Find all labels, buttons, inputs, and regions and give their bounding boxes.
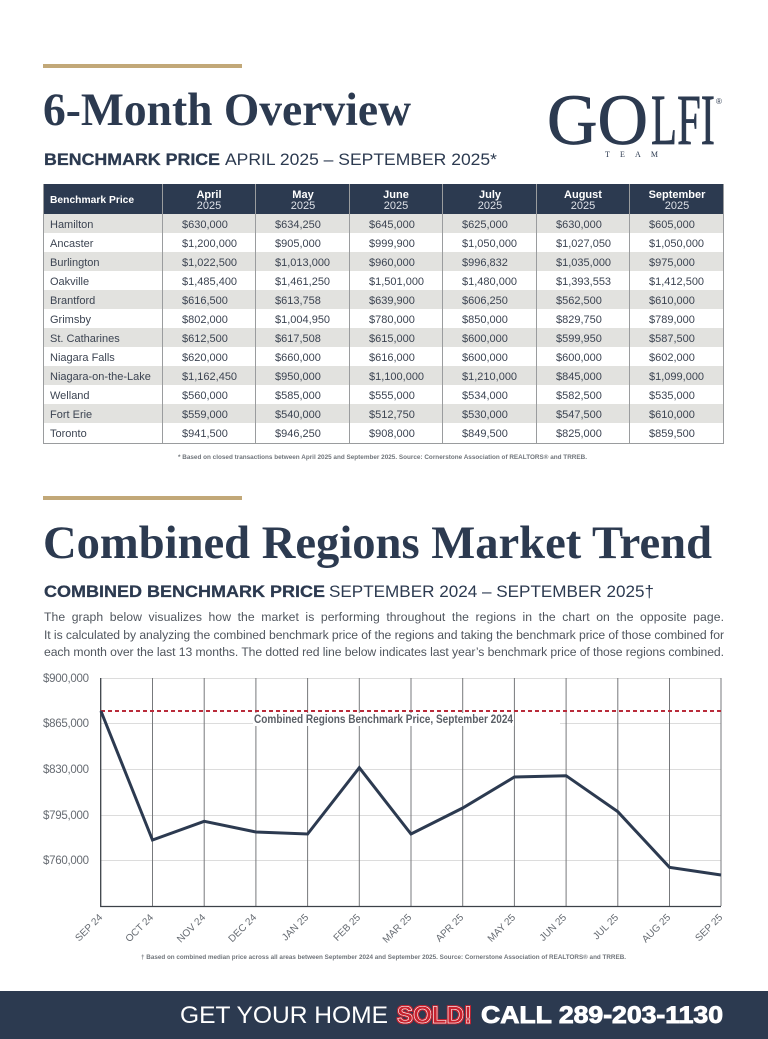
row: Hamilton: $634,250 — [275, 219, 321, 231]
row: Ancaster: Ancaster — [50, 238, 94, 250]
table header: May — [292, 189, 315, 201]
row: Ancaster: $1,050,000 — [462, 238, 517, 250]
table header: 2025 — [291, 200, 315, 212]
y-axis labels — [43, 673, 89, 867]
x-axis labels: SEP 24 — [73, 912, 105, 944]
row: Welland: $585,000 — [275, 390, 321, 402]
table header: June — [383, 189, 409, 201]
row: Fort Erie: $530,000 — [462, 409, 508, 421]
row: Ancaster — [50, 238, 704, 250]
row: Welland — [50, 390, 695, 402]
x-axis labels: AUG 25 — [640, 912, 673, 945]
row: Grimsby: $789,000 — [649, 314, 695, 326]
row: Burlington — [50, 257, 695, 269]
y-axis labels: $795,000 — [43, 810, 89, 822]
x-axis labels: JAN 25 — [280, 912, 311, 943]
row: Grimsby: $780,000 — [369, 314, 415, 326]
row: Hamilton — [50, 219, 695, 231]
row: Burlington: Burlington — [50, 257, 100, 269]
footer banner — [0, 991, 768, 1039]
line chart: combined benchmark price — [43, 673, 725, 946]
row: Grimsby — [50, 314, 695, 326]
row: Welland: $560,000 — [182, 390, 228, 402]
row: Hamilton: Hamilton — [50, 219, 93, 231]
reference line label: Combined Regions Benchmark Price, September 2024 — [254, 714, 514, 726]
subtitle: benchmark price: APRIL 2025 – SEPTEMBER 2025* — [225, 150, 497, 169]
row: Oakville: Oakville — [50, 276, 89, 288]
row: Grimsby: Grimsby — [50, 314, 91, 326]
logo: Golfi Team: GO — [547, 80, 648, 160]
row: Oakville: $1,501,000 — [369, 276, 424, 288]
table footnote: * Based on closed transactions between April 2025 and September 2025. Source: Cornerstone Association of REALTORS® and TRREB. — [178, 454, 587, 461]
row: Brantford — [50, 295, 695, 307]
table header: 2025 — [665, 200, 689, 212]
row: Oakville: $1,412,500 — [649, 276, 704, 288]
row: Burlington: $960,000 — [369, 257, 415, 269]
logo: Golfi Team — [547, 80, 722, 160]
row: Niagara Falls: $600,000 — [556, 352, 602, 364]
row: Oakville: $1,393,553 — [556, 276, 611, 288]
x-axis labels: JUL 25 — [591, 912, 621, 942]
table header: 2025 — [197, 200, 221, 212]
call to action text: GET YOUR HOME — [180, 1002, 388, 1029]
row: Toronto: $946,250 — [275, 428, 321, 440]
table header — [43, 184, 724, 214]
description text: It is calculated by analyzing the combined benchmark price of the regions and taking the benchmark price of those combined for — [44, 628, 724, 642]
row: Ancaster: $1,200,000 — [182, 238, 237, 250]
y-axis labels: $830,000 — [43, 764, 89, 776]
subtitle: combined benchmark price — [44, 582, 654, 601]
row: Fort Erie — [50, 409, 695, 421]
row: Niagara Falls: $602,000 — [649, 352, 695, 364]
table header: August — [564, 189, 602, 201]
row: Ancaster: $1,050,000 — [649, 238, 704, 250]
row: Toronto: $941,500 — [182, 428, 228, 440]
row: Niagara-on-the-Lake: Niagara-on-the-Lake — [50, 371, 151, 383]
row: St. Catharines: $617,508 — [275, 333, 321, 345]
row: Welland: $534,000 — [462, 390, 508, 402]
row: Brantford: $639,900 — [369, 295, 415, 307]
row: Fort Erie: $540,000 — [275, 409, 321, 421]
row: Toronto: $849,500 — [462, 428, 508, 440]
call to action text: CALL 289-203-1130 — [481, 1002, 723, 1029]
y-axis labels: $900,000 — [43, 673, 89, 685]
chart footnote: † Based on combined median price across all areas between September 2024 and September 2025. Source: Cornerstone Association of REALTORS® and TRREB. — [141, 954, 626, 961]
call to action text: SOLD! — [397, 1002, 472, 1029]
row: Hamilton: $630,000 — [556, 219, 602, 231]
x-axis labels: SEP 25 — [693, 912, 725, 944]
row: Niagara-on-the-Lake: $1,210,000 — [462, 371, 517, 383]
row: Ancaster: $999,900 — [369, 238, 415, 250]
x-axis labels: FEB 25 — [332, 912, 363, 944]
accent rule: overview — [43, 64, 242, 68]
row: Brantford: $613,758 — [275, 295, 321, 307]
accent rule: trend — [43, 496, 242, 500]
row: Niagara Falls: $616,000 — [369, 352, 415, 364]
table header: 2025 — [571, 200, 595, 212]
row: Niagara-on-the-Lake: $1,162,450 — [182, 371, 237, 383]
logo: Golfi Team: LFI — [651, 80, 715, 160]
row: St. Catharines: $600,000 — [462, 333, 508, 345]
x-axis labels: MAY 25 — [486, 912, 518, 945]
row: Ancaster: $1,027,050 — [556, 238, 611, 250]
row: Niagara Falls: $620,000 — [182, 352, 228, 364]
row: Niagara Falls: $600,000 — [462, 352, 508, 364]
description text — [44, 610, 724, 659]
row: St. Catharines — [50, 333, 695, 345]
x-axis labels: NOV 24 — [175, 912, 208, 945]
row: Oakville: $1,480,000 — [462, 276, 517, 288]
row: Hamilton: $630,000 — [182, 219, 228, 231]
table: benchmark prices — [43, 184, 724, 444]
row: Burlington: $1,035,000 — [556, 257, 611, 269]
row: Toronto — [50, 428, 695, 440]
row: Hamilton: $605,000 — [649, 219, 695, 231]
row: Niagara-on-the-Lake: $1,099,000 — [649, 371, 704, 383]
row: Niagara-on-the-Lake: $1,100,000 — [369, 371, 424, 383]
row: St. Catharines: $615,000 — [369, 333, 415, 345]
row: Welland: $555,000 — [369, 390, 415, 402]
description text: each month over the last 13 months. The dotted red line below indicates last year’s benchmark price of those regions combined. — [44, 645, 724, 659]
subtitle: benchmark price: BENCHMARK PRICE — [44, 150, 220, 169]
row: Welland: $535,000 — [649, 390, 695, 402]
x-axis labels: MAR 25 — [381, 912, 414, 946]
row: Niagara Falls — [50, 352, 695, 364]
row: St. Catharines: $587,500 — [649, 333, 695, 345]
row: Oakville: $1,485,400 — [182, 276, 237, 288]
call to action text — [180, 1002, 723, 1029]
row: Niagara-on-the-Lake — [50, 371, 704, 383]
title: Combined Regions Market Trend: Combined Regions Market Trend — [43, 517, 712, 569]
table header: April — [196, 189, 222, 201]
x-axis labels: JUN 25 — [538, 912, 569, 944]
row: Brantford: $606,250 — [462, 295, 508, 307]
row: Grimsby: $802,000 — [182, 314, 228, 326]
subtitle: combined benchmark price: SEPTEMBER 2024 – SEPTEMBER 2025† — [329, 582, 654, 601]
table header: 2025 — [384, 200, 408, 212]
row: Toronto: $908,000 — [369, 428, 415, 440]
row: Fort Erie: $547,500 — [556, 409, 602, 421]
row: Ancaster: $905,000 — [275, 238, 321, 250]
table header: September — [649, 189, 706, 201]
row: Hamilton: $625,000 — [462, 219, 508, 231]
row: St. Catharines: St. Catharines — [50, 333, 120, 345]
row: Niagara-on-the-Lake: $845,000 — [556, 371, 602, 383]
y-axis labels: $865,000 — [43, 718, 89, 730]
row: Fort Erie: $610,000 — [649, 409, 695, 421]
data line — [101, 711, 721, 875]
row: Niagara-on-the-Lake: $950,000 — [275, 371, 321, 383]
x-axis labels: APR 25 — [434, 912, 466, 944]
row: Oakville — [50, 276, 704, 288]
row: Toronto: $859,500 — [649, 428, 695, 440]
row: Niagara Falls: Niagara Falls — [50, 352, 115, 364]
row: Burlington: $975,000 — [649, 257, 695, 269]
table header: Benchmark Price — [50, 195, 134, 206]
row: Fort Erie: Fort Erie — [50, 409, 92, 421]
row: Grimsby: $850,000 — [462, 314, 508, 326]
table header: July — [479, 189, 502, 201]
row: Toronto: Toronto — [50, 428, 87, 440]
row: Welland: Welland — [50, 390, 90, 402]
red dashed reference line — [101, 710, 721, 712]
y-axis labels: $760,000 — [43, 855, 89, 867]
x-axis labels: DEC 24 — [227, 912, 259, 945]
title: 6-Month Overview: 6-Month Overview — [43, 84, 411, 136]
row: Hamilton: $645,000 — [369, 219, 415, 231]
row: Brantford: Brantford — [50, 295, 95, 307]
row: Niagara Falls: $660,000 — [275, 352, 321, 364]
row: St. Catharines: $599,950 — [556, 333, 602, 345]
row: Burlington: $996,832 — [462, 257, 508, 269]
row: Burlington: $1,022,500 — [182, 257, 237, 269]
row: Brantford: $562,500 — [556, 295, 602, 307]
row: Brantford: $610,000 — [649, 295, 695, 307]
row: Welland: $582,500 — [556, 390, 602, 402]
x-axis labels — [73, 912, 725, 946]
row: Fort Erie: $512,750 — [369, 409, 415, 421]
logo: Golfi Team: ® — [716, 97, 722, 106]
row: Fort Erie: $559,000 — [182, 409, 228, 421]
subtitle: benchmark price — [44, 150, 497, 169]
row: Grimsby: $829,750 — [556, 314, 602, 326]
row: Burlington: $1,013,000 — [275, 257, 330, 269]
table header: 2025 — [478, 200, 502, 212]
row: Toronto: $825,000 — [556, 428, 602, 440]
row: Brantford: $616,500 — [182, 295, 228, 307]
x-axis labels: OCT 24 — [124, 912, 156, 945]
subtitle: combined benchmark price: COMBINED BENCHMARK PRICE — [44, 582, 325, 601]
logo: Golfi Team: TEAM — [605, 150, 658, 159]
row: Oakville: $1,461,250 — [275, 276, 330, 288]
description text: The graph below visualizes how the market is performing throughout the regions in the chart on the opposite page. — [44, 610, 724, 624]
row: Grimsby: $1,004,950 — [275, 314, 330, 326]
row: St. Catharines: $612,500 — [182, 333, 228, 345]
